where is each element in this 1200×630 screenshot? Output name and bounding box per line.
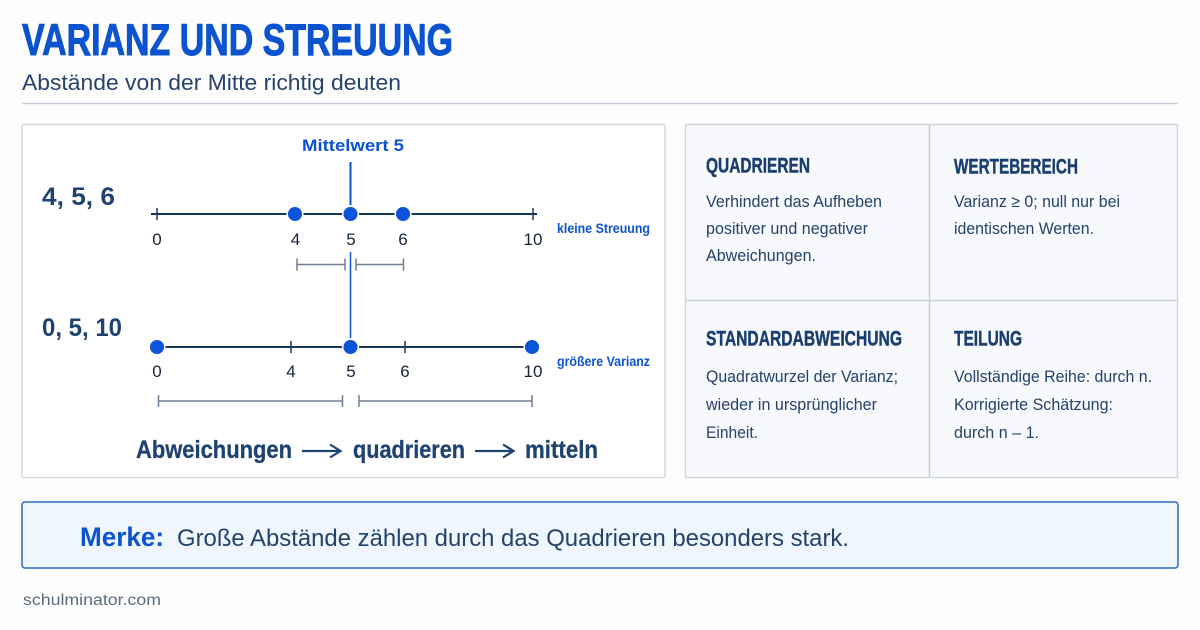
card: Standardabweichung xyxy=(705,328,902,442)
mean line xyxy=(350,162,352,338)
number line: large spread: 4 xyxy=(286,362,296,381)
number line: large spread: 6 xyxy=(400,362,410,381)
card: Quadrieren: Abweichungen. xyxy=(706,247,816,265)
number line: large spread xyxy=(149,339,542,381)
spread label: large: größere Varianz xyxy=(557,353,650,369)
number line: small spread: 4 xyxy=(291,230,300,249)
card: Quadrieren: Verhindert das Aufheben xyxy=(706,193,882,211)
card: Standardabweichung: STANDARDABWEICHUNG xyxy=(706,328,902,350)
mean label: Mittelwert 5 xyxy=(302,137,404,155)
number line: small spread: 0 xyxy=(152,230,162,249)
card: Quadrieren: QUADRIEREN xyxy=(706,154,810,178)
card: Teilung: Korrigierte Schätzung: xyxy=(954,396,1113,414)
callout: Merke xyxy=(22,502,1178,568)
series label: 0, 5, 10: 0, 5, 10 xyxy=(42,314,122,342)
number line: small spread: 6 xyxy=(398,230,408,249)
title: VARIANZ UND STREUUNG xyxy=(22,16,453,65)
card: Wertebereich: identischen Werten. xyxy=(954,220,1094,238)
process formula: quadrieren xyxy=(353,436,465,464)
card: Teilung: Vollständige Reihe: durch n. xyxy=(954,368,1152,386)
card: Quadrieren xyxy=(706,154,882,265)
card: Quadrieren: positiver und negativer xyxy=(706,220,868,238)
card: Wertebereich: WERTEBEREICH xyxy=(954,156,1078,178)
number line: small spread: 10 xyxy=(524,230,542,249)
number line: small spread xyxy=(151,206,542,249)
card: Wertebereich xyxy=(954,156,1120,238)
card: Teilung: TEILUNG xyxy=(954,328,1022,350)
card: Teilung xyxy=(954,328,1152,442)
number line: large spread: 0 xyxy=(152,362,162,381)
card: Standardabweichung: Quadratwurzel der Varianz; xyxy=(706,368,898,386)
series label: 4, 5, 6: 4, 5, 6 xyxy=(42,183,115,211)
spread label: small: kleine Streuung xyxy=(557,220,650,236)
card: Teilung: durch n – 1. xyxy=(954,424,1039,442)
callout: Merke: Große Abstände zählen durch das Quadrieren besonders stark. xyxy=(177,525,849,552)
subtitle: Abstände von der Mitte richtig deuten xyxy=(22,70,401,95)
footer source: schulminator.com xyxy=(23,592,161,609)
arrow xyxy=(302,444,340,458)
number line: small spread: 5 xyxy=(346,230,356,249)
number line: large spread: 5 xyxy=(346,362,356,381)
panel: number line comparison xyxy=(22,124,665,478)
deviation brackets: small xyxy=(297,258,404,270)
process formula: mitteln xyxy=(525,436,598,464)
card: Standardabweichung: wieder in ursprünglicher xyxy=(705,396,877,414)
number line: large spread: 10 xyxy=(524,362,542,381)
card: Wertebereich: Varianz ≥ 0; null nur bei xyxy=(954,193,1120,211)
deviation brackets: large xyxy=(158,395,532,407)
process formula: Abweichungen xyxy=(136,436,292,464)
callout: Merke: Merke: xyxy=(80,522,164,552)
process formula xyxy=(136,436,598,464)
panel: facts grid xyxy=(685,124,1178,478)
card: Standardabweichung: Einheit. xyxy=(706,424,758,442)
arrow xyxy=(475,444,514,458)
